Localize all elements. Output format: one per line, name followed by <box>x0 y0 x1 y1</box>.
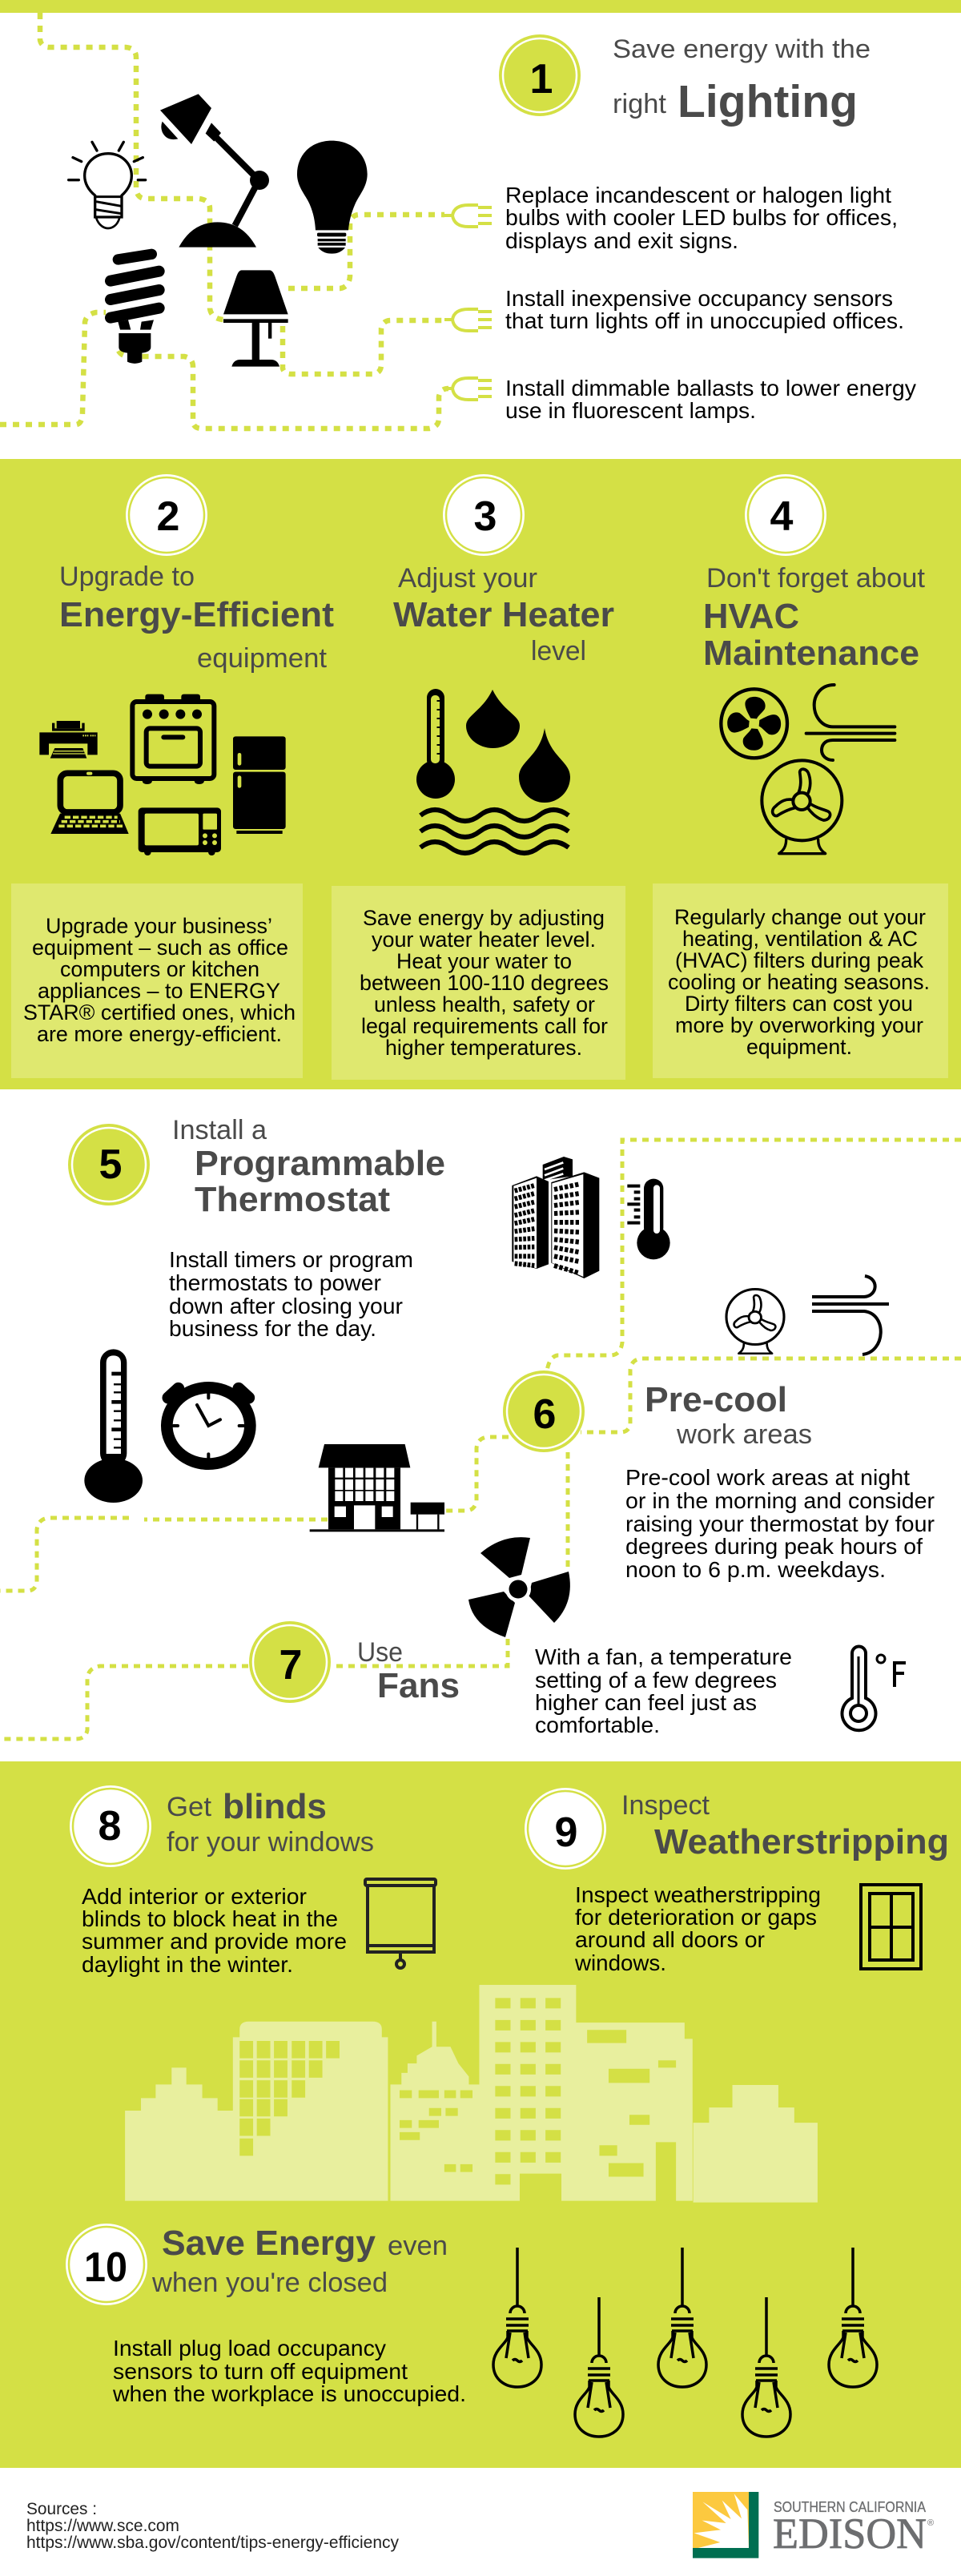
text: lighting tip 2: that turn lights off in unoccupied offices. <box>505 308 904 333</box>
icon: hanging bulb 3 <box>658 2248 706 2387</box>
icon: hanging bulb 1 <box>493 2248 541 2387</box>
number badge 8: 8 <box>99 1803 121 1849</box>
panel: white section steps 5-7 <box>0 1115 961 1739</box>
callout: HVAC filters: Regularly change out your <box>674 905 926 929</box>
callout: equipment upgrade: are more energy-efficient. <box>37 1022 282 1046</box>
footer sources: Sources : <box>26 2500 97 2518</box>
icons: lamps and bulbs <box>69 94 368 367</box>
icon: CFL bulb <box>111 254 159 364</box>
icon: microwave <box>139 807 221 855</box>
footer sources: https://www.sce.com <box>26 2517 179 2535</box>
front fan <box>721 689 787 758</box>
heading: lighting <box>613 34 871 127</box>
text: programmable thermostat: thermostats to power <box>169 1270 381 1295</box>
water waves <box>420 810 569 853</box>
number badge 9: 9 <box>555 1809 577 1856</box>
heading: energy-efficient <box>59 561 334 674</box>
text: pre-cool: degrees during peak hours of <box>625 1534 923 1559</box>
icon: fahrenheit thermometer <box>842 1647 906 1730</box>
heading: save energy: even <box>388 2231 448 2261</box>
heading: lighting: Save energy with the <box>613 34 871 63</box>
text: weatherstripping: windows. <box>574 1950 666 1975</box>
icon: stove <box>132 694 214 784</box>
number badge 3 <box>443 474 525 556</box>
heading: programmable thermostat: Thermostat <box>195 1180 390 1219</box>
dashed wiring: lighting <box>0 13 448 429</box>
number badge 3: 3 <box>474 493 497 540</box>
number badge 10 <box>66 2224 147 2305</box>
heading: HVAC: HVAC <box>703 597 799 636</box>
callout: HVAC filters <box>653 883 948 1078</box>
icon: big thermometer <box>84 1349 143 1503</box>
text: weatherstripping: Inspect weatherstripping <box>575 1882 821 1907</box>
thermometer <box>416 689 455 799</box>
panel: lighting section <box>0 13 916 429</box>
heading: programmable thermostat: Install a <box>172 1115 267 1145</box>
text: blinds: daylight in the winter. <box>82 1952 293 1977</box>
callout: equipment upgrade: STAR® certified ones, which <box>23 1000 296 1024</box>
water drop 1 <box>466 690 520 748</box>
text: lighting tip 1: bulbs with cooler LED bulbs for offices, <box>505 205 898 230</box>
icon: hanging bulb 4 <box>742 2297 790 2437</box>
heading: energy-efficient: Energy-Efficient <box>59 595 334 634</box>
callout: water heater: Save energy by adjusting <box>363 906 605 930</box>
heading: pre-cool: Pre-cool <box>645 1380 787 1419</box>
icon: HVAC fans <box>721 685 895 854</box>
text: pre-cool: or in the morning and consider <box>625 1488 935 1513</box>
icon: small desk fan and wind <box>726 1276 889 1354</box>
icon: office towers and thermometer <box>512 1157 670 1278</box>
text: fans: higher can feel just as <box>535 1690 757 1715</box>
heading: save energy <box>151 2224 448 2298</box>
icon: laptop <box>50 772 129 834</box>
callout: equipment upgrade: equipment – such as office <box>32 936 288 960</box>
icon: roller blind <box>365 1879 436 1968</box>
number badge 4: 4 <box>770 493 794 540</box>
heading: water heater <box>393 563 614 666</box>
number badge 2 <box>126 474 207 556</box>
icon: small office building <box>310 1444 444 1532</box>
skyline illustration <box>125 1985 818 2203</box>
text: fans: setting of a few degrees <box>535 1668 777 1693</box>
icon: plug 1 <box>444 205 492 227</box>
callout: water heater: Heat your water to <box>396 949 572 973</box>
callout: HVAC filters: equipment. <box>746 1035 852 1059</box>
callout: water heater <box>332 886 625 1080</box>
icon: fridge <box>233 736 286 834</box>
callout: equipment upgrade: Upgrade your business’ <box>46 914 272 938</box>
icons: thermometer, clock and building <box>84 1349 444 1532</box>
heading: water heater: Adjust your <box>398 563 537 594</box>
heading: pre-cool <box>645 1380 812 1450</box>
number badge 7: 7 <box>279 1642 302 1688</box>
icon: desk lamp <box>160 94 269 248</box>
number badge 2: 2 <box>157 493 179 540</box>
icon: solid bulb <box>297 141 368 254</box>
text: programmable thermostat: Install timers or program <box>169 1247 413 1272</box>
callout: HVAC filters: more by overworking your <box>675 1013 923 1037</box>
heading: save energy: when you're closed <box>151 2268 388 2298</box>
icon: plug 3 <box>444 378 492 400</box>
text: pre-cool: raising your thermostat by four <box>625 1511 935 1536</box>
text: lighting tip 2 <box>505 286 904 333</box>
text: occupancy sensors: Install plug load occupancy <box>113 2336 386 2361</box>
number badge 4 <box>745 474 826 556</box>
heading: programmable thermostat <box>172 1115 445 1219</box>
office towers <box>512 1157 599 1278</box>
text: weatherstripping: around all doors or <box>575 1927 765 1952</box>
heading: weatherstripping: Inspect <box>621 1790 710 1821</box>
number badge 6 <box>503 1371 585 1452</box>
heading: HVAC <box>703 563 926 673</box>
heading: HVAC: Don't forget about <box>706 563 926 594</box>
text: lighting tip 2: Install inexpensive occupancy sensors <box>505 286 893 311</box>
heading: energy-efficient: equipment <box>197 643 328 674</box>
logo wordmark: EDISON <box>773 2510 927 2558</box>
wind lines <box>806 685 895 760</box>
heading: save energy: Save Energy <box>162 2224 376 2263</box>
callout: HVAC filters: (HVAC) filters during peak <box>675 948 923 972</box>
text: programmable thermostat: business for the day. <box>169 1316 376 1341</box>
icons: office appliances <box>39 694 286 855</box>
panel: green band steps 2-4 <box>0 459 961 1089</box>
text: occupancy sensors: when the workplace is unoccupied. <box>112 2381 466 2406</box>
heading: weatherstripping: Weatherstripping <box>654 1822 949 1862</box>
callout: water heater: your water heater level. <box>372 928 596 952</box>
text: lighting tip 1 <box>505 183 898 253</box>
footer sources <box>26 2500 399 2552</box>
thermometer with scale <box>627 1179 670 1259</box>
heading: pre-cool: work areas <box>676 1419 812 1450</box>
icon: thermometer and water <box>416 689 570 853</box>
text: occupancy sensors: sensors to turn off equipment <box>113 2359 408 2384</box>
text: pre-cool <box>625 1465 935 1582</box>
heading: blinds: for your windows <box>167 1827 374 1858</box>
callout: equipment upgrade: appliances – to ENERGY <box>38 979 280 1003</box>
icon: printer <box>39 721 98 759</box>
text: pre-cool: noon to 6 p.m. weekdays. <box>625 1557 886 1582</box>
top green bar <box>0 0 961 13</box>
heading: use fans <box>357 1637 460 1705</box>
heading: weatherstripping <box>621 1790 949 1862</box>
panel: green band steps 8-10 <box>0 1761 961 2468</box>
icon: radial fan <box>468 1537 570 1637</box>
text: programmable thermostat <box>169 1247 413 1341</box>
logo mark <box>693 2492 758 2558</box>
text: fans: With a fan, a temperature <box>535 1644 792 1669</box>
dashed wiring: steps 5-7 <box>0 1140 961 1739</box>
footer sources: https://www.sba.gov/content/tips-energy-efficiency <box>26 2534 399 2552</box>
logo wordmark: SOUTHERN CALIFORNIA <box>774 2499 926 2515</box>
callout: water heater: legal requirements call for <box>361 1014 608 1038</box>
text: lighting tip 3: use in fluorescent lamps. <box>505 398 756 423</box>
desk fan <box>762 760 842 854</box>
logo: Southern California Edison <box>693 2492 934 2558</box>
icon: outline bulb <box>69 142 146 228</box>
heading: water heater: Water Heater <box>393 595 614 634</box>
text: lighting tip 3 <box>505 376 916 423</box>
heading: programmable thermostat: Programmable <box>195 1144 445 1183</box>
water drop 2 <box>519 728 570 803</box>
callout: HVAC filters: heating, ventilation & AC <box>682 927 918 951</box>
heading: energy-efficient: Upgrade to <box>59 561 195 592</box>
text: blinds <box>82 1884 347 1977</box>
text: lighting tip 3: Install dimmable ballasts to lower energy <box>505 376 916 400</box>
number badge 1: 1 <box>530 56 553 103</box>
heading: blinds <box>167 1787 374 1858</box>
number badge 6: 6 <box>533 1391 556 1438</box>
heading: use fans: Use <box>357 1637 403 1668</box>
icon: window <box>861 1885 921 1969</box>
heading: lighting: right <box>613 89 667 119</box>
callout: equipment upgrade: computers or kitchen <box>60 957 259 981</box>
heading: lighting: Lighting <box>678 76 858 127</box>
number badge 1 <box>499 34 581 116</box>
number badge 8 <box>70 1785 151 1867</box>
text: blinds: Add interior or exterior <box>82 1884 307 1909</box>
callout: water heater: between 100-110 degrees <box>360 971 609 995</box>
callout: water heater: higher temperatures. <box>385 1036 582 1060</box>
heading: HVAC: Maintenance <box>703 634 919 673</box>
callout: HVAC filters: Dirty filters can cost you <box>685 992 913 1016</box>
heading: use fans: Fans <box>377 1666 460 1705</box>
logo wordmark: ® <box>927 2518 934 2528</box>
number badge 9 <box>525 1788 606 1870</box>
heading: water heater: level <box>531 636 586 666</box>
heading: blinds: Get <box>167 1792 212 1822</box>
icon: table lamp <box>223 270 288 367</box>
text: fans: comfortable. <box>535 1713 660 1737</box>
text: fans <box>535 1644 792 1737</box>
text: programmable thermostat: down after closing your <box>169 1294 403 1318</box>
text: lighting tip 1: displays and exit signs. <box>505 228 738 253</box>
icon: hanging bulb 2 <box>575 2297 623 2437</box>
icon: alarm clock <box>167 1387 250 1464</box>
text: occupancy sensors <box>112 2336 466 2406</box>
icon: plug 2 <box>444 309 492 331</box>
icon: hanging bulb 5 <box>829 2248 877 2387</box>
number badge 7 <box>249 1621 331 1703</box>
callout: water heater: unless health, safety or <box>374 992 595 1016</box>
number badge 5 <box>68 1124 150 1205</box>
text: pre-cool: Pre-cool work areas at night <box>625 1465 910 1490</box>
callout: HVAC filters: cooling or heating seasons. <box>668 970 930 994</box>
callout: equipment upgrade <box>11 883 303 1078</box>
heading: blinds: blinds <box>223 1787 327 1826</box>
text: blinds: blinds to block heat in the <box>82 1906 338 1931</box>
text: blinds: summer and provide more <box>82 1929 347 1954</box>
text: weatherstripping <box>574 1882 821 1975</box>
text: lighting tip 1: Replace incandescent or halogen light <box>505 183 891 207</box>
number badge 5: 5 <box>99 1141 122 1188</box>
number badge 10: 10 <box>84 2244 127 2291</box>
text: weatherstripping: for deterioration or gaps <box>575 1905 817 1930</box>
